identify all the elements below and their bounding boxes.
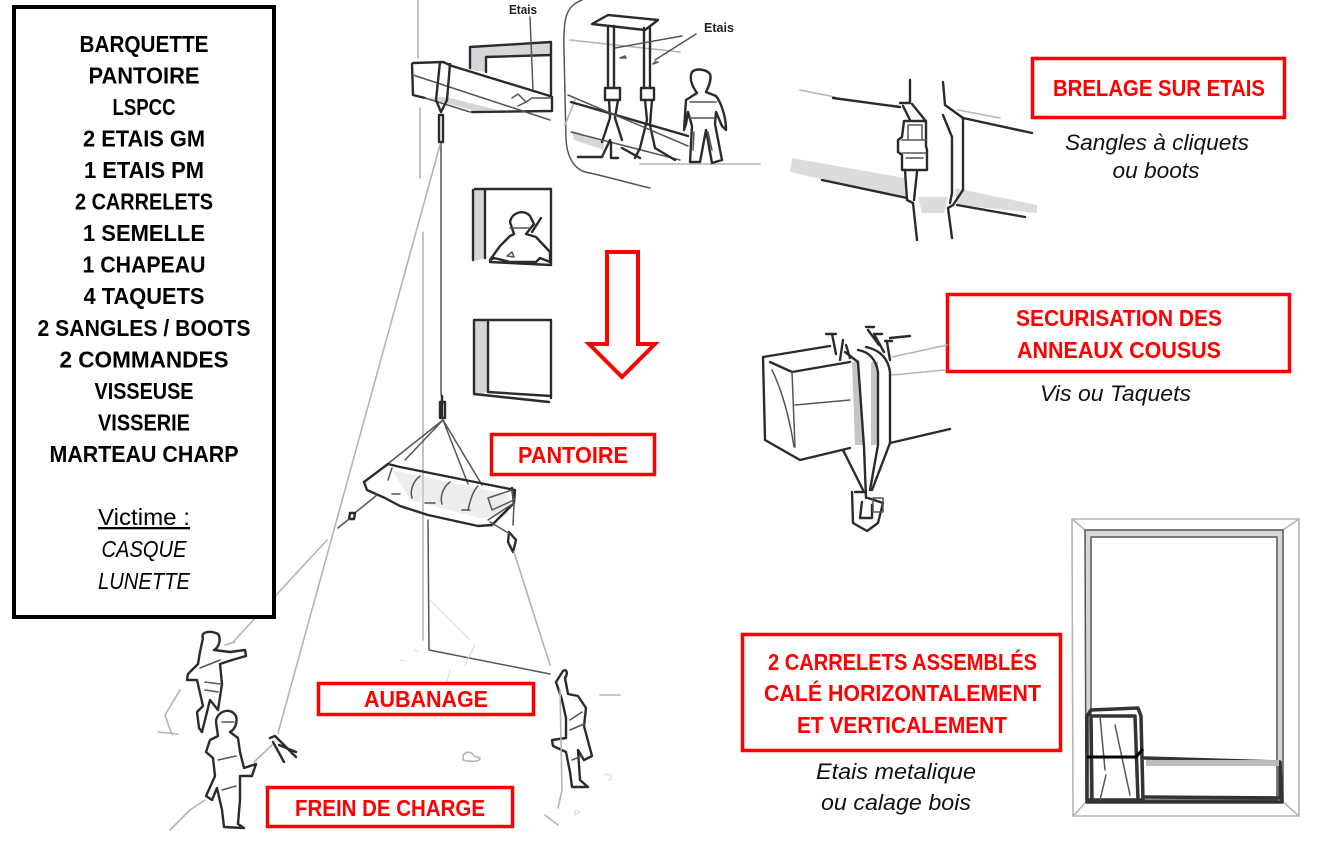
label: 2 CARRELETS ASSEMBLÉS [742,634,1060,750]
caption: Etais metalique ou calage bois [816,759,976,815]
label: PANTOIRE: PANTOIRE [518,442,628,468]
sketch: sewn rings on timber with screws [763,327,950,531]
label: SECURISATION DES ANNEAUX COUSUS [948,294,1290,372]
caption: Sangles à cliquets ou boots [1065,130,1249,183]
caption: Vis ou Taquets: Vis ou Taquets [1040,381,1191,406]
label: PANTOIRE [492,434,654,474]
label: BRELAGE SUR ETAIS [1032,58,1284,118]
sketch: ratchet strap on prop [790,80,1037,240]
inventory panel: PANTOIRE [88,62,200,88]
inventory panel: LUNETTE [98,568,191,594]
caption: Etais metalique ou calage bois: ou calage bois [821,790,971,815]
label: 2 CARRELETS ASSEMBLÉS: CALÉ HORIZONTALEMENT [764,679,1041,706]
cut line [1087,749,1143,757]
icon: prop head plate [592,15,658,30]
inventory panel: MARTEAU CHARP [50,441,238,467]
inventory panel: 2 SANGLES / BOOTS [38,315,250,341]
inventory panel: 4 TAQUETS [84,283,204,309]
sketch: stretcher slung on pantoire [364,396,515,526]
inventory panel: 1 CHAPEAU [82,252,206,278]
inventory panel: BARQUETTE [80,31,208,57]
label: FREIN DE CHARGE [268,788,512,826]
figure: guy-line handler, right [545,670,620,825]
ground details [400,650,612,815]
icon: frein de charge brake device [270,736,296,762]
annotation: Etais (right): Etais [704,20,734,35]
label: 2 CARRELETS ASSEMBLÉS: ET VERTICALEMENT [797,712,1007,738]
label: BRELAGE SUR ETAIS: BRELAGE SUR ETAIS [1053,75,1265,101]
sketch: lower empty window [474,320,551,402]
rope: left guy line [233,495,377,642]
label: 2 CARRELETS ASSEMBLÉS: 2 CARRELETS ASSEMBLÉS [768,648,1037,675]
caption: Sangles à cliquets ou boots: Sangles à cliquets [1065,130,1249,155]
inventory panel: LSPCC [112,94,176,120]
label: SECURISATION DES ANNEAUX COUSUS: ANNEAUX COUSUS [1017,337,1221,363]
building wall lines [418,0,550,690]
inventory panel: Victime : [98,504,190,530]
inventory panel: 1 SEMELLE [83,220,205,246]
inventory panel: 2 CARRELETS [75,188,213,214]
label: FREIN DE CHARGE: FREIN DE CHARGE [295,795,485,821]
inventory panel: 1 ETAIS PM [84,157,204,183]
sketch: beam through upper window [412,17,552,142]
inventory panel: VISSEUSE [94,378,194,404]
inventory panel: CASQUE [102,536,187,562]
sketch: barge hull with props and rescuer [564,0,760,188]
label: AUBANAGE: AUBANAGE [364,686,488,712]
rope: right guy line [490,522,550,665]
figure: rescuer standing in barge [684,70,726,163]
annotation: Etais (left): Etais [509,2,537,17]
sketch: middle window with rescuer [473,189,551,265]
label: SECURISATION DES ANNEAUX COUSUS: SECURISATION DES [1016,305,1222,331]
ropes: hoist lines [278,143,441,733]
inventory panel: 2 COMMANDES [60,346,228,372]
label: AUBANAGE [318,684,534,714]
props [602,26,655,148]
inventory panel: 2 ETAIS GM [83,126,205,152]
caption: Sangles à cliquets ou boots: ou boots [1112,158,1200,183]
sketch: window frame with wedged timbers [1072,519,1299,816]
inventory panel: VISSERIE [98,410,190,436]
red arrow pointing down [589,252,655,377]
caption: Etais metalique ou calage bois: Etais metalique [816,759,976,784]
figure: guy-line handler, left [158,632,246,735]
inventory panel [14,7,274,617]
figure: brake-line handler [170,711,272,830]
